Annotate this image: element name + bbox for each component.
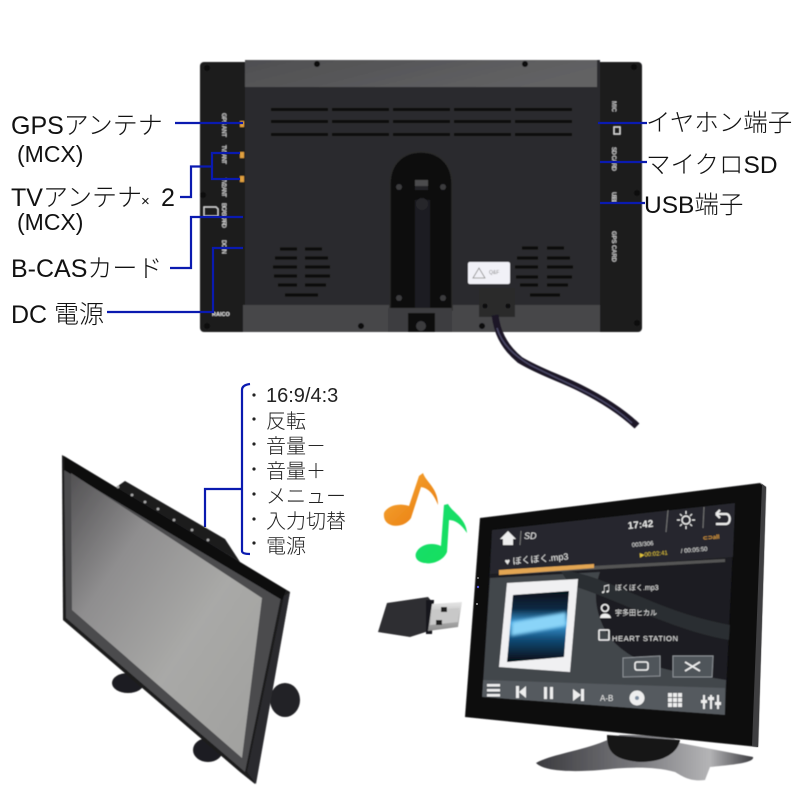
port labels left: TV1 ANT [220, 145, 226, 164]
track title: ♥ ぼくぼく.mp3 [504, 551, 569, 567]
repeat indicator: ⊂⊃all [703, 535, 720, 542]
label: MCX 2: (MCX) [17, 209, 83, 235]
power brand mark: RAICO [212, 312, 230, 318]
icon: green music note [416, 504, 467, 563]
indicator lights [476, 577, 479, 605]
rear view of monitor [200, 60, 642, 426]
icon: home [500, 531, 516, 545]
port labels left: TV2 ANT [220, 178, 226, 197]
top bar dividers [520, 507, 704, 545]
stand bracket [390, 152, 452, 310]
sd card icon [204, 207, 218, 216]
monitor screen [71, 473, 262, 758]
label: earphone jack: イヤホン端子 [646, 109, 792, 137]
callout: button list [205, 384, 250, 554]
icon: USB stick [378, 597, 462, 637]
headphone port icon [614, 127, 620, 134]
button function list: 16:9/4:3 [266, 385, 338, 407]
monitor screen: 宇多田ヒカル [615, 608, 657, 617]
stand foot [388, 308, 452, 332]
album icon [599, 630, 609, 640]
stand feet [112, 673, 144, 693]
rear cable [495, 315, 637, 426]
progress bar [499, 559, 725, 575]
label: DC power: DC 電源 [11, 301, 104, 329]
monitor body [62, 455, 290, 784]
power clamp [479, 288, 515, 317]
total time: / 00:05:50 [681, 547, 708, 555]
monitor screen: ぼくぼく.mp3 [615, 584, 659, 592]
elapsed time: ▶00:02:41 [640, 551, 669, 559]
clock: 17:42 [627, 519, 654, 532]
button function list [252, 385, 346, 558]
label: MCX 1: (MCX) [17, 141, 83, 167]
label: USB port: USB端子 [644, 191, 743, 219]
port labels left: GPS ANT [220, 113, 226, 137]
label: TV antenna: 2 [161, 184, 175, 212]
button function list: 音量－ [266, 435, 326, 458]
song info: ♫ [600, 580, 611, 597]
icon: brightness [677, 511, 695, 529]
album art [499, 579, 578, 672]
button function list: 入力切替 [266, 510, 346, 533]
front monitor [465, 483, 766, 780]
stand screws [396, 184, 446, 301]
monitor body [465, 483, 766, 747]
callout: earphone [598, 122, 647, 124]
callout: DC [107, 248, 243, 312]
album name: HEART STATION [612, 634, 678, 643]
port labels left: DC IN [220, 240, 226, 254]
label: TV antenna: TVアンテナ [11, 184, 142, 212]
angled monitor [62, 455, 300, 784]
port labels right: GPS CARD [610, 231, 616, 263]
bottom toolbar icons [487, 684, 721, 709]
monitor screen [482, 503, 735, 715]
warning label [468, 262, 510, 284]
label: GPS antenna: GPSアンテナ [11, 112, 163, 140]
icon: orange music note [384, 473, 438, 526]
connectors [240, 121, 244, 182]
icon: back [716, 510, 730, 524]
sd label: SD [524, 531, 537, 541]
shuffle button [673, 656, 713, 677]
A-B label: A-B [600, 694, 613, 703]
label: B-CAS: B-CASカード [11, 255, 162, 283]
port labels right: MIC [610, 101, 616, 113]
button function list: 電源 [266, 535, 306, 558]
port labels right: USB1 [610, 192, 616, 204]
track counter: 003/306 [632, 541, 654, 549]
monitor side [752, 484, 766, 747]
callout: B-CAS [170, 217, 243, 268]
repeat button [623, 656, 660, 677]
callout: TV [180, 153, 240, 197]
button function list: 音量＋ [266, 460, 326, 483]
port labels left [220, 113, 226, 254]
monitor stand [536, 735, 753, 780]
right speaker grille [515, 248, 573, 295]
button function list: 反転 [266, 410, 306, 433]
label: TV antenna: × [141, 193, 150, 210]
callout lines [107, 123, 647, 554]
screws [200, 61, 640, 329]
artist [602, 604, 608, 612]
rear housing [200, 62, 642, 332]
button function list: メニュー [266, 486, 346, 508]
label: micro SD: マイクロSD [646, 152, 778, 179]
port labels right [610, 101, 616, 263]
button ridge [115, 481, 240, 562]
callout: USB [600, 202, 645, 204]
callout: GPS [175, 122, 243, 124]
port labels left: B-CAS CARD [220, 203, 226, 229]
callout: micro SD [600, 161, 647, 163]
left speaker grille [273, 249, 330, 295]
warning label: Q&F [489, 270, 499, 276]
side buttons [117, 486, 209, 541]
rear vents [271, 108, 572, 136]
port labels right: SD CARD [610, 147, 616, 172]
